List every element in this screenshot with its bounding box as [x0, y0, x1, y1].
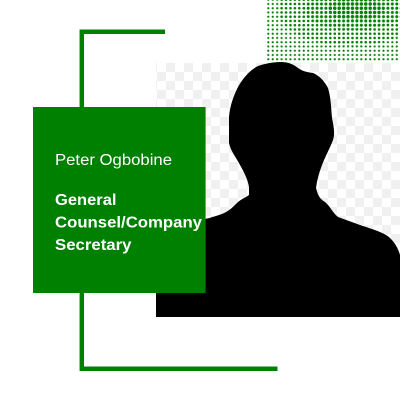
- halftone dot pattern: [266, 0, 400, 61]
- green name panel: [33, 107, 206, 293]
- job title: Secretary: [55, 237, 132, 254]
- job title: Counsel/Company: [55, 214, 202, 232]
- bottom bracket line: [82, 290, 278, 369]
- job title: [55, 192, 202, 254]
- job title: General: [55, 192, 116, 209]
- person name: Peter Ogbobine: [55, 152, 172, 169]
- top bracket line: [82, 32, 165, 110]
- person silhouette: [156, 62, 400, 317]
- checkerboard photo background: [156, 63, 400, 317]
